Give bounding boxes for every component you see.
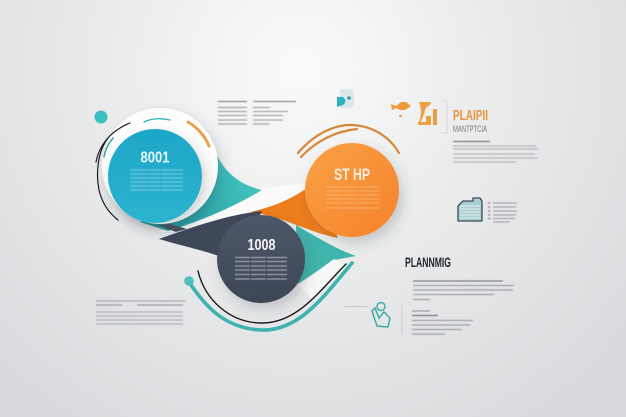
step 2 orange circle: [298, 125, 399, 237]
connector lines: [345, 305, 402, 334]
orange arcs: [298, 125, 399, 157]
teal ribbon: [140, 153, 262, 231]
label ST HP: ST HP: [334, 165, 370, 184]
heading block PLANNMIG: [405, 254, 514, 300]
icon: teal speech badge: [337, 89, 354, 108]
icon: orange fish arrow: [391, 102, 411, 117]
orange ribbon: [250, 183, 338, 238]
right teal ribbon: [296, 225, 356, 284]
body lines: [96, 312, 183, 324]
small teal arc: [104, 138, 113, 157]
badge dot: [347, 96, 351, 100]
step 3 dark circle: [217, 215, 305, 303]
black swoosh line: [198, 264, 346, 323]
top centre text columns: [218, 102, 296, 124]
badge background: [340, 89, 354, 108]
heading: PLAIPII: [453, 108, 488, 124]
rule: [96, 300, 186, 302]
orange disc body text: [326, 187, 380, 208]
caption: [96, 304, 183, 306]
white ribbon patch: [298, 259, 346, 298]
icon: folder: [458, 198, 482, 221]
teal accent dot: [94, 110, 108, 124]
swoosh ball: [184, 276, 194, 286]
orange disc: [305, 143, 399, 237]
heading block PLAIPII: [453, 108, 538, 162]
number 1008: 1008: [248, 237, 276, 254]
body lines: [453, 142, 538, 162]
bracket divider: [441, 101, 447, 133]
heading: PLANNMIG: [405, 254, 451, 270]
dark ribbon: [159, 211, 262, 262]
dark disc body text: [235, 258, 287, 279]
black arcs: [96, 123, 130, 220]
dark ribbon sliver: [157, 224, 187, 232]
dark disc: [217, 215, 305, 303]
white ribbon band: [160, 183, 312, 232]
lower left text block: [96, 301, 186, 324]
orange arc: [188, 122, 209, 146]
swoosh under dark circle: [184, 263, 352, 330]
subheading: MANTPTCIA: [453, 124, 487, 135]
number 8001: 8001: [140, 150, 170, 166]
top teal arc: [144, 119, 170, 122]
icon: teal person: [372, 302, 390, 327]
icon: orange tool chart: [418, 102, 437, 125]
lower right text block: [412, 311, 473, 334]
folder outline: [458, 198, 482, 221]
blue disc body text: [130, 170, 183, 190]
badge glyph: [337, 97, 345, 107]
blue disc: [108, 129, 202, 223]
teal swoosh: [189, 263, 352, 330]
folder stripes: [460, 206, 480, 218]
folder bullet list: [488, 203, 517, 222]
white backing disc: [102, 108, 218, 224]
ribbon shapes: [140, 153, 356, 298]
body lines: [413, 281, 514, 300]
step 1 blue circle: [96, 108, 218, 224]
